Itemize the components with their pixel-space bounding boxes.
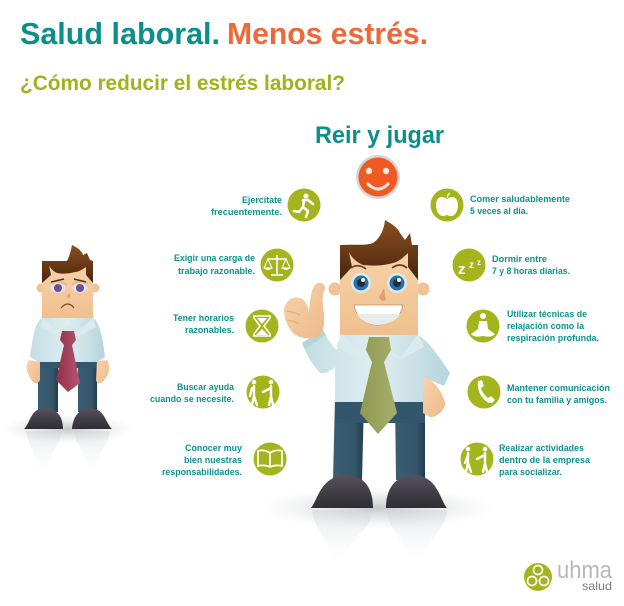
icon: sleep zzz: z (458, 261, 466, 278)
item: help: Buscar ayuda (177, 382, 235, 393)
item: responsibilities: Conocer muy (185, 443, 243, 454)
item: relaxation: relajación como la (507, 321, 585, 332)
item: relaxation: respiración profunda. (507, 333, 599, 344)
icon: runner (288, 188, 320, 222)
legs (38, 360, 97, 412)
item: socialize: Realizar actividades (499, 443, 584, 454)
hands (27, 360, 109, 383)
item: responsibilities (162, 442, 286, 478)
item: schedule (173, 310, 278, 342)
item: sleep: 7 y 8 horas diarias. (492, 266, 570, 277)
item: workload: trabajo razonable. (178, 266, 255, 277)
icon: meditation (466, 310, 500, 342)
shoes (311, 475, 447, 508)
icon: hourglass (246, 310, 278, 342)
left column items (150, 188, 320, 478)
subtitle: ¿Cómo reducir el estrés laboral? (20, 72, 345, 95)
item: relaxation (466, 309, 599, 344)
logo mark (524, 563, 552, 591)
item: sleep (452, 248, 570, 282)
head (36, 245, 100, 318)
icon: scales (260, 248, 294, 282)
item: workload (174, 248, 294, 282)
title: Salud laboral. (20, 16, 220, 51)
hand: thumbs up (284, 283, 325, 338)
item: exercise: frecuentemente. (211, 207, 282, 218)
logo: uhma salud: salud (582, 579, 612, 593)
item: responsibilities: responsabilidades. (162, 467, 242, 478)
legs (333, 398, 425, 480)
icon: book (254, 442, 286, 476)
title: Menos estrés. (227, 16, 428, 51)
shadow and reflection (260, 487, 496, 562)
collar (41, 318, 96, 336)
happy man figure (260, 220, 496, 562)
item: eat healthy (430, 188, 570, 222)
head (328, 220, 430, 335)
item: schedule: Tener horarios (173, 313, 234, 324)
smile (354, 305, 403, 325)
title (20, 16, 428, 51)
shadow and reflection (0, 414, 136, 472)
icon: sleep zzz: z (469, 260, 474, 271)
shirt (30, 318, 105, 362)
item: help (150, 376, 280, 408)
item: communication: con tu familia y amigos. (507, 395, 607, 406)
icon: sleep zzz (452, 248, 486, 282)
item: sleep: Dormir entre (492, 254, 547, 265)
icon: sleep zzz: z (477, 258, 481, 267)
item: exercise (211, 188, 320, 222)
item: schedule: razonables. (185, 325, 234, 336)
hand on hip (423, 378, 445, 417)
shirt and arms (302, 330, 450, 402)
item: eat healthy: Comer saludablemente (470, 194, 570, 205)
shoes (24, 408, 112, 429)
tie (56, 331, 80, 392)
icon: smiley (356, 155, 400, 199)
item: socialize: para socializar. (499, 467, 562, 478)
sad man figure (0, 245, 136, 472)
icon: two people (246, 376, 280, 408)
item: responsibilities: bien nuestras (184, 455, 242, 466)
item: eat healthy: 5 veces al día. (470, 206, 528, 217)
eyes (351, 273, 407, 293)
logo: uhma salud: uhma (557, 557, 613, 584)
right column items (430, 188, 610, 478)
item: communication: Mantener comunicación (507, 383, 610, 394)
icon: phone (468, 376, 500, 408)
item: communication (468, 376, 610, 408)
collar (336, 334, 424, 360)
item: exercise: Ejercítate (242, 195, 282, 206)
icon: apple (430, 188, 464, 222)
icon: handshake people (460, 442, 494, 476)
logo: uhma salud (524, 557, 613, 593)
heading: Reir y jugar: Reir y jugar (315, 122, 444, 149)
item: relaxation: Utilizar técnicas de (507, 309, 587, 320)
item: socialize (460, 442, 591, 478)
item: socialize: dentro de la empresa (499, 455, 591, 466)
item: workload: Exigir una carga de (174, 253, 255, 264)
item: help: cuando se necesite. (150, 394, 234, 405)
tie (360, 337, 397, 434)
